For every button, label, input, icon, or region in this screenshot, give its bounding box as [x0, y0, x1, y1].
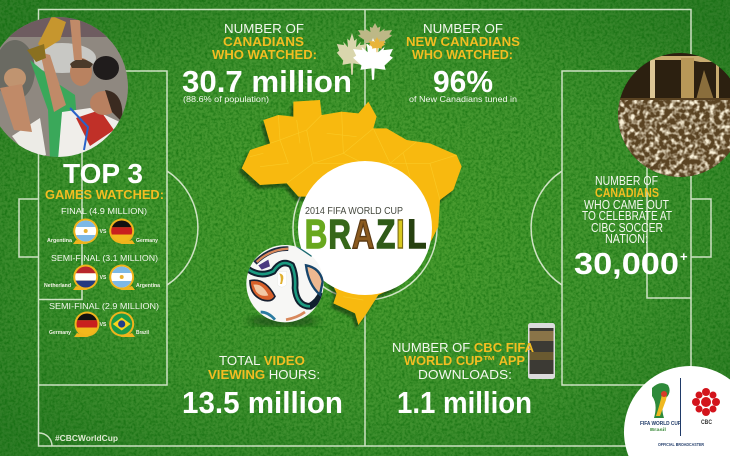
stat: Canadians who watched: 30.7 million: [182, 64, 352, 99]
game 2: SEMI-FINAL (3.1 MILLION): [51, 254, 158, 263]
stat: Canadians at CIBC Soccer Nation: TO CELEBRATE AT: [582, 208, 672, 223]
game 3: Germany: [49, 330, 71, 336]
logo wordmark: A: [352, 211, 374, 257]
game 3: Brazil: [136, 330, 150, 336]
panel: top 3 games watched: GAMES WATCHED:: [45, 187, 164, 202]
stat: Canadians at CIBC Soccer Nation: CANADIANS: [595, 185, 659, 200]
panel: top 3 games watched: [44, 158, 164, 337]
left photo: trophy celebration: [0, 15, 130, 160]
broadcaster badge: Brasil: [650, 427, 666, 432]
stat: app downloads: [392, 340, 535, 420]
logo wordmark: L: [407, 211, 426, 257]
hashtag: #CBCWorldCup: [55, 434, 118, 443]
stat: Canadians at CIBC Soccer Nation: NUMBER OF: [595, 173, 658, 188]
stat: app downloads: 1.1 million: [397, 385, 532, 420]
game 1: Argentina: [47, 238, 72, 244]
game 2: Netherland: [44, 283, 71, 289]
stat: total video viewing hours: [182, 353, 343, 420]
game 2: VS: [100, 275, 107, 281]
icon: smartphone: [528, 323, 555, 379]
game 1: FINAL (4.9 MILLION): [61, 207, 147, 216]
broadcaster badge: FIFA WORLD CUP: [640, 421, 682, 427]
stat: new Canadians who watched: of New Canadians tuned in: [409, 95, 517, 104]
stat: total video viewing hours: TOTAL VIDEO: [219, 353, 305, 368]
stat: new Canadians who watched: NUMBER OF: [423, 21, 503, 36]
stat: Canadians who watched: WHO WATCHED:: [212, 47, 317, 62]
game 1: [47, 207, 158, 244]
stat: app downloads: DOWNLOADS:: [418, 367, 512, 382]
stat: Canadians who watched: NUMBER OF: [224, 21, 304, 36]
game 3: VS: [100, 322, 107, 328]
teammates in white: [58, 108, 119, 157]
logo wordmark: R: [328, 211, 351, 257]
stat: total video viewing hours: VIEWING HOURS:: [208, 367, 320, 382]
logo wordmark: I: [396, 211, 405, 257]
logo heading: 2014 FIFA WORLD CUP: [305, 206, 403, 217]
stat: Canadians at CIBC Soccer Nation: NATION:: [605, 231, 648, 246]
stat: app downloads: NUMBER OF CBC FIFA: [392, 340, 535, 355]
stat: new Canadians who watched: NEW CANADIANS: [406, 34, 520, 49]
right photo: crowd at CIBC Soccer Nation: [618, 53, 730, 177]
stat: new Canadians who watched: 96%: [433, 64, 493, 99]
game 1: VS: [100, 229, 107, 235]
stat: Canadians at CIBC Soccer Nation: +: [680, 249, 688, 264]
stat: Canadians at CIBC Soccer Nation: CIBC SOCCER: [591, 220, 663, 235]
icon: CBC gem: [692, 388, 720, 416]
game 2: Argentina: [136, 283, 160, 289]
game 3: SEMI-FINAL (2.9 MILLION): [49, 302, 159, 311]
icon: World Cup emblem: [652, 383, 670, 418]
map of Brazil: [239, 100, 462, 329]
center circle with logo: [298, 161, 432, 295]
stat: Canadians who watched: CANADIANS: [223, 34, 304, 49]
icon: maple leaves: [337, 23, 393, 80]
game 1: Germany: [136, 238, 158, 244]
logo wordmark: Z: [376, 211, 395, 257]
soccer ball: [246, 245, 324, 326]
goalkeeper in green: [30, 60, 80, 160]
trophy: [38, 16, 66, 50]
stat: Canadians at CIBC Soccer Nation: WHO CAME OUT: [584, 197, 669, 212]
broadcaster badge: OFFICIAL BROADCASTER: [658, 442, 705, 447]
stat: new Canadians who watched: [406, 21, 520, 104]
stat: Canadians at CIBC Soccer Nation: [574, 173, 688, 281]
stat: Canadians who watched: [182, 21, 352, 104]
game 2: [44, 254, 160, 290]
broadcaster badge: [624, 366, 730, 456]
heading: TOP 3: [63, 158, 143, 189]
game 3: [49, 302, 159, 337]
logo wordmark: B: [305, 211, 327, 257]
stat: new Canadians who watched: WHO WATCHED:: [412, 47, 513, 62]
broadcaster badge: CBC: [701, 420, 713, 426]
stat: total video viewing hours: 13.5 million: [182, 385, 343, 420]
stat: Canadians who watched: (88.6% of population): [183, 95, 269, 104]
stat: Canadians at CIBC Soccer Nation: 30,000: [574, 246, 679, 281]
stat: app downloads: WORLD CUP™ APP: [404, 353, 525, 368]
